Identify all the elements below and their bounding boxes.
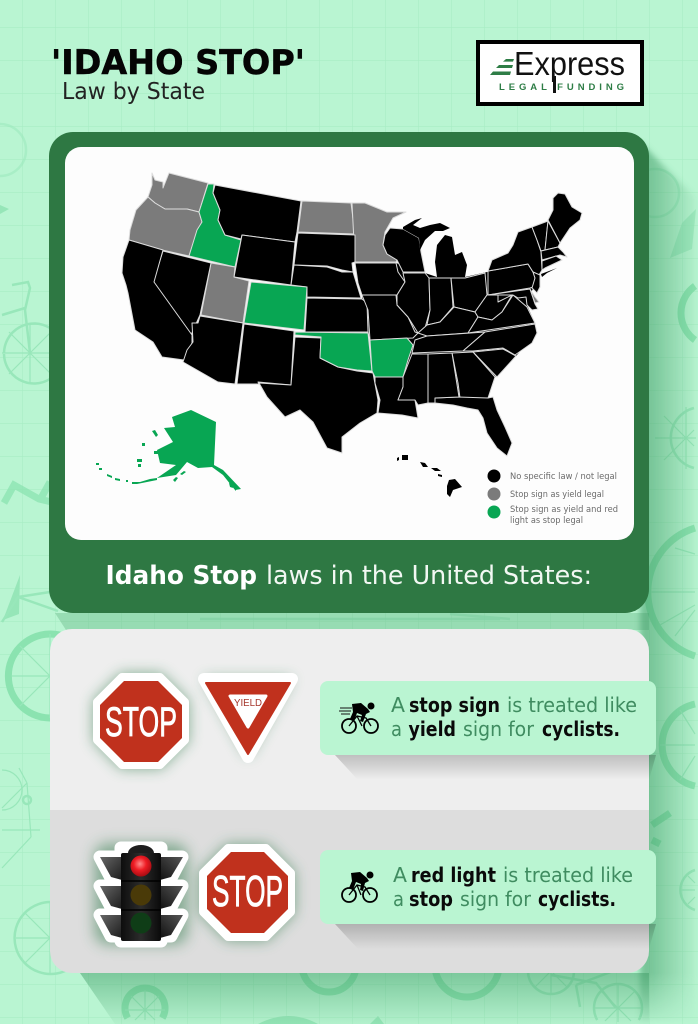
icon: cyclist with speed lines — [339, 702, 378, 733]
legend: Stop sign as yield legal — [510, 490, 604, 500]
icon: yield sign — [203, 678, 293, 758]
panel: map — [49, 132, 649, 613]
callout text: cyclists. — [538, 887, 616, 911]
US map — [122, 173, 582, 456]
callout text: sign for — [460, 887, 532, 911]
callout text — [393, 863, 633, 911]
callout text: is treated like — [503, 863, 633, 887]
callout text: A — [391, 693, 405, 717]
legend: Stop sign as yield and red — [510, 505, 618, 515]
icon: cyclist — [342, 872, 377, 902]
callout text: yield — [408, 717, 456, 741]
legend: No specific law / not legal — [510, 472, 617, 482]
icon: stop sign — [199, 844, 295, 941]
Hawaii — [397, 455, 462, 497]
callout text: cyclists. — [542, 717, 620, 741]
callout: red light as stop — [320, 850, 656, 949]
icon: traffic light — [94, 843, 188, 945]
map caption: Idaho Stop — [106, 561, 257, 591]
map caption: laws in the United States: — [266, 561, 592, 591]
title: 'IDAHO STOP' — [51, 43, 305, 83]
callout text: is treated like — [507, 693, 637, 717]
legend — [488, 470, 618, 526]
callout text: a — [393, 887, 404, 911]
callout text: sign for — [463, 717, 535, 741]
icon: stop sign — [93, 673, 189, 769]
Alaska — [96, 410, 241, 491]
logo: Express Legal Funding: Express — [514, 45, 625, 82]
subtitle: Law by State — [62, 79, 205, 105]
callout text: stop sign — [409, 693, 500, 717]
long shadows behind panels — [55, 142, 696, 1024]
row 1 signs — [93, 673, 293, 769]
title — [51, 43, 305, 105]
callout text — [391, 693, 637, 741]
map caption — [106, 561, 592, 591]
legend: light as stop legal — [510, 516, 583, 526]
row 2 signs — [94, 843, 295, 945]
callout text: A — [393, 863, 407, 887]
logo: Express Legal Funding: LEGAL FUNDING — [499, 82, 624, 93]
icon: stop sign: STOP — [105, 698, 177, 745]
logo: Express Legal Funding — [478, 42, 642, 104]
icon: stop sign: STOP — [212, 867, 283, 916]
callout text: stop — [409, 887, 453, 911]
callout text: a — [391, 717, 402, 741]
callout: stop sign as yield — [320, 681, 656, 780]
callout text: red light — [411, 863, 496, 887]
panel: explanations — [50, 629, 656, 973]
icon: yield sign: YIELD — [234, 698, 262, 709]
